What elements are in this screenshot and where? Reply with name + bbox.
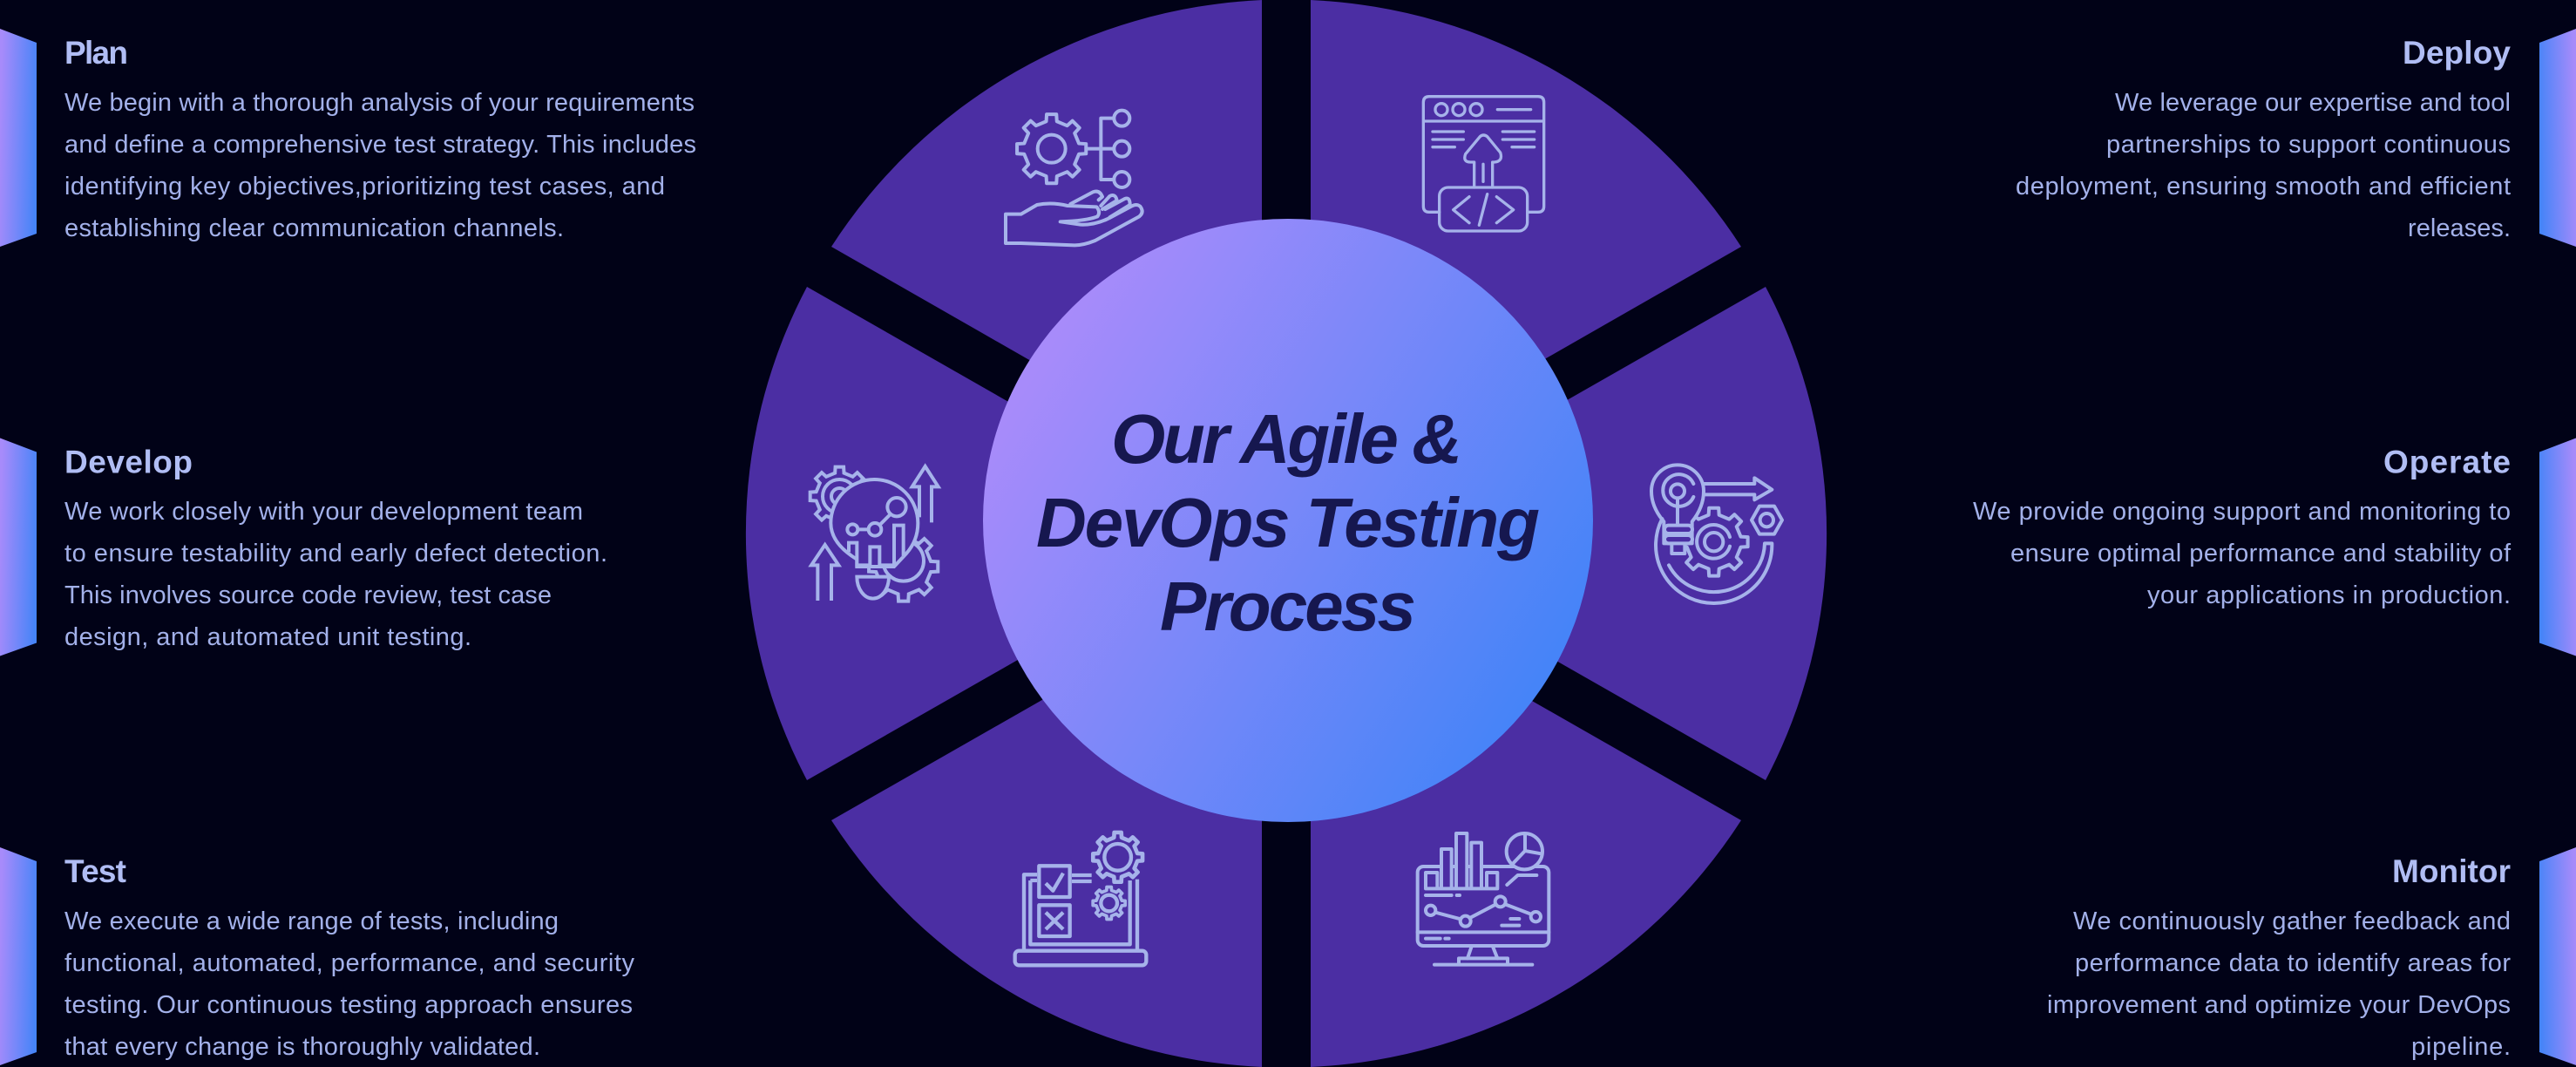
accent bar: develop <box>0 438 37 656</box>
heading: develop: Develop <box>64 445 193 479</box>
text: monitor description: pipeline. <box>2411 1033 2511 1061</box>
text: test description: functional, automated, performance, and security <box>64 949 634 977</box>
icon: operate bulb, gear and nut <box>1651 465 1782 603</box>
text: develop description: We work closely with your development team <box>64 498 583 526</box>
text: plan description: establishing clear communication channels. <box>64 214 564 242</box>
text: deploy description: deployment, ensuring smooth and efficient <box>2016 173 2511 200</box>
title: DevOps Testing <box>1036 484 1540 561</box>
panel: plan <box>0 29 696 247</box>
heading: plan: Plan <box>64 35 128 71</box>
panel: develop <box>0 438 607 656</box>
text: test description <box>64 907 634 1061</box>
accent bar: operate <box>2539 438 2576 656</box>
text: monitor description <box>2047 907 2511 1061</box>
text: develop description: This involves source code review, test case <box>64 581 552 609</box>
title: Process <box>1160 567 1416 645</box>
panel: operate <box>1973 438 2576 656</box>
icon: deploy browser window with code <box>1423 97 1544 231</box>
heading: monitor: Monitor <box>2392 853 2511 889</box>
heading: test: Test <box>64 853 126 889</box>
accent bar: monitor <box>2539 847 2576 1065</box>
text: develop description <box>64 498 607 651</box>
text: monitor description: improvement and optimize your DevOps <box>2047 991 2511 1019</box>
heading: operate: Operate <box>2383 445 2511 479</box>
wheel segments <box>746 0 1827 1067</box>
text: deploy description: We leverage our expertise and tool <box>2115 89 2511 117</box>
text: operate description: ensure optimal performance and stability of <box>2010 540 2512 567</box>
text: develop description: design, and automated unit testing. <box>64 623 471 651</box>
accent bar: deploy <box>2539 29 2576 247</box>
title <box>1036 400 1540 645</box>
text: plan description: identifying key objectives,prioritizing test cases, and <box>64 173 665 200</box>
panel: deploy <box>2016 29 2576 247</box>
text: monitor description: performance data to identify areas for <box>2075 949 2511 977</box>
text: test description: that every change is thoroughly validated. <box>64 1033 540 1061</box>
icon: develop head with chart, gears and arrows <box>810 466 939 601</box>
accent bar: test <box>0 847 37 1065</box>
heading: deploy: Deploy <box>2403 35 2511 71</box>
text: operate description: We provide ongoing support and monitoring to <box>1973 498 2511 526</box>
accent bar: plan <box>0 29 37 247</box>
panel: test <box>0 847 634 1065</box>
text: plan description: We begin with a thorough analysis of your requirements <box>64 89 695 117</box>
text: operate description: your applications in production. <box>2147 581 2511 609</box>
text: deploy description <box>2016 89 2511 242</box>
title: Our Agile & <box>1111 400 1462 478</box>
text: deploy description: releases. <box>2408 214 2511 242</box>
text: operate description <box>1973 498 2512 609</box>
text: test description: We execute a wide range of tests, including <box>64 907 559 935</box>
icon: monitor with charts <box>1418 833 1549 965</box>
text: deploy description: partnerships to support continuous <box>2106 131 2511 159</box>
text: monitor description: We continuously gather feedback and <box>2073 907 2511 935</box>
text: develop description: to ensure testability and early defect detection. <box>64 540 607 567</box>
icon: test laptop with checklist and gears <box>1015 833 1146 965</box>
text: test description: testing. Our continuous testing approach ensures <box>64 991 633 1019</box>
icon: plan gear and hand <box>1006 111 1142 245</box>
center circle <box>983 219 1593 822</box>
panel: monitor <box>2047 847 2576 1065</box>
text: plan description: and define a comprehensive test strategy. This includes <box>64 131 696 159</box>
text: plan description <box>64 89 696 242</box>
